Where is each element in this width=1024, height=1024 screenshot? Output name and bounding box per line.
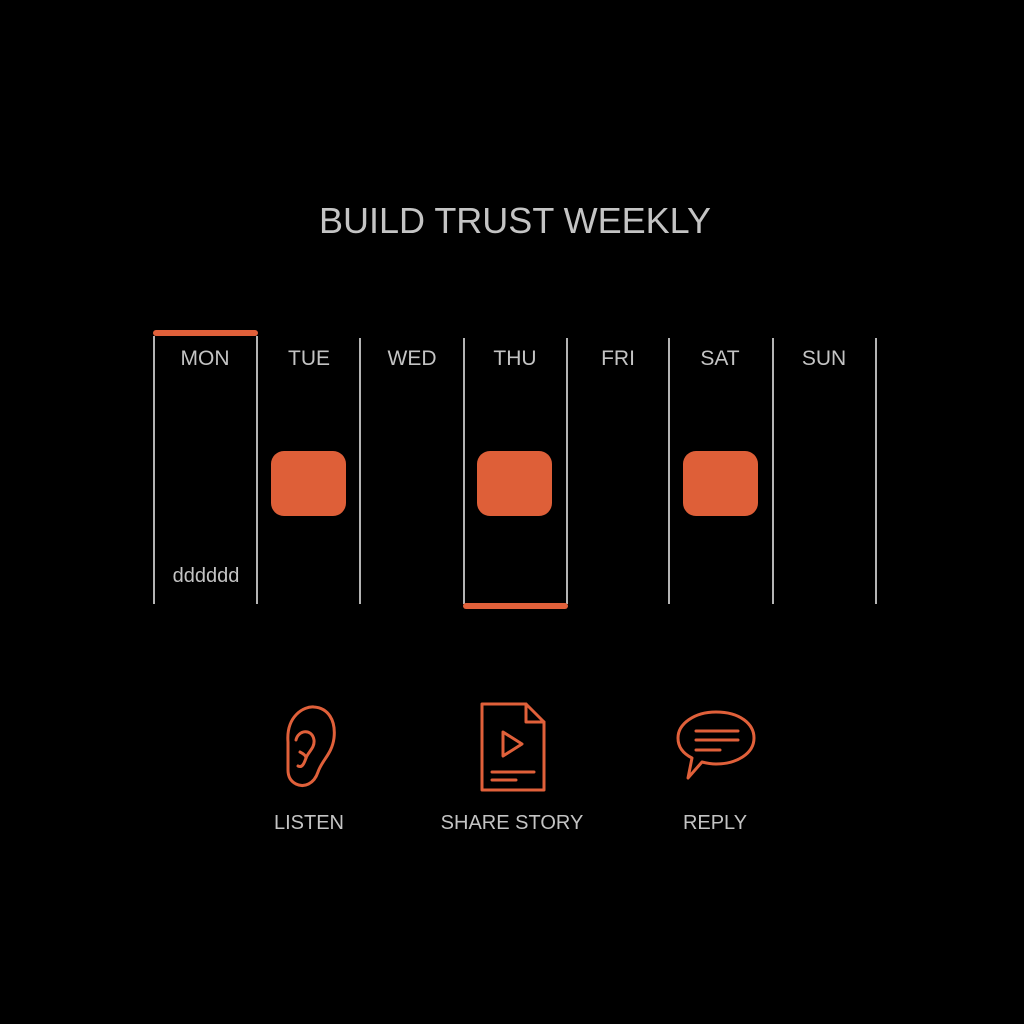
labels: SHARE STORY — [441, 812, 583, 834]
MON note: dddddd — [173, 565, 239, 587]
labels: REPLY — [683, 812, 747, 834]
THU highlight bar — [463, 603, 568, 609]
day labels: WED — [388, 347, 436, 370]
day labels: SAT — [700, 347, 740, 370]
title: BUILD TRUST WEEKLY — [319, 200, 711, 241]
day labels — [180, 347, 846, 370]
day labels: MON — [180, 347, 230, 370]
MON highlight bar — [153, 330, 258, 336]
icon: document with play (share story) — [482, 704, 544, 790]
block: SAT — [683, 451, 758, 516]
block: TUE — [271, 451, 346, 516]
labels: LISTEN — [274, 812, 344, 834]
icon: ear (listen) — [288, 707, 334, 786]
day labels: FRI — [601, 347, 635, 370]
weekly calendar — [153, 330, 876, 609]
day labels: SUN — [802, 347, 846, 370]
labels — [274, 812, 747, 834]
day labels: TUE — [288, 347, 330, 370]
day labels: THU — [493, 347, 537, 370]
block: THU — [477, 451, 552, 516]
icon: speech bubble (reply) — [678, 712, 754, 778]
